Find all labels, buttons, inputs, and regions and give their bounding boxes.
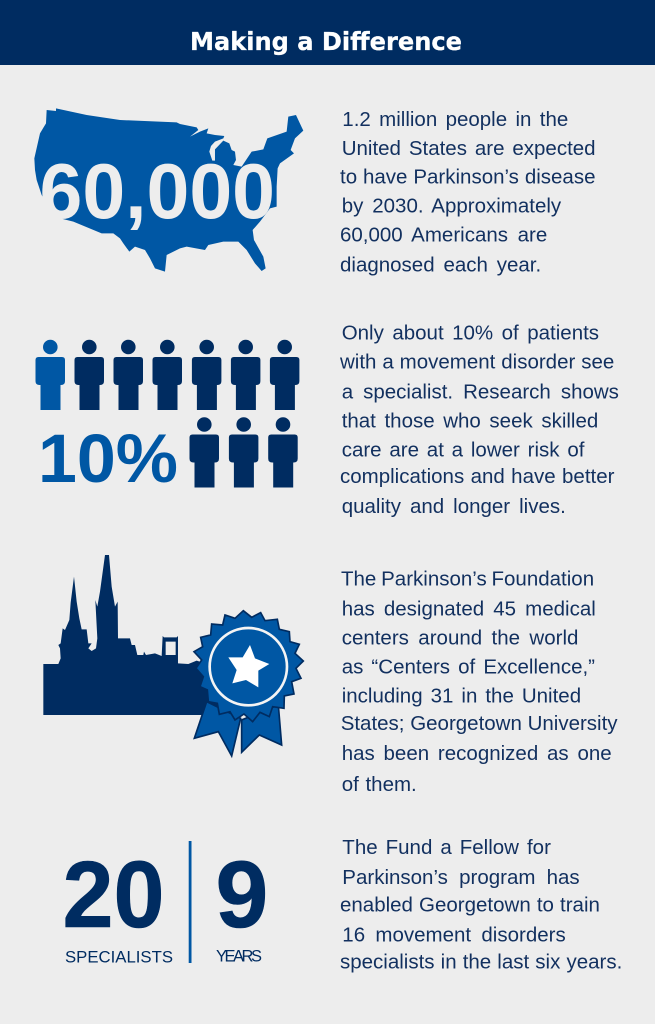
text block: specialist care: quality and longer lives. [342, 495, 566, 518]
panel: fellowship numbers [62, 836, 622, 973]
text block: prevalence: 60,000 Americans are [340, 224, 547, 247]
text block: fellowship: 16 movement disorders [342, 924, 566, 947]
text block: specialist care: care are at a lower risk of [342, 438, 585, 461]
big number 60,000: 60,000 [40, 147, 275, 235]
text block: fellowship: specialists in the last six years. [340, 950, 622, 973]
stat: 20 specialists: 20 [62, 842, 164, 948]
text block: specialist care: with a movement disorder see [339, 351, 614, 374]
text block: prevalence: by 2030. Approximately [342, 195, 562, 218]
text block: specialist care: Only about 10% of patients [342, 322, 599, 345]
panel: centers of excellence [43, 555, 618, 796]
panel: US statistic [34, 108, 596, 277]
text block: prevalence [340, 108, 596, 277]
stat: 9 years: 9 [216, 842, 268, 948]
stat: 20 specialists: SPECIALISTS [65, 949, 173, 967]
panel: specialist care [36, 322, 619, 518]
icon: people row one [74, 340, 299, 410]
text block: centers of excellence: has been recognized as one [342, 742, 612, 765]
star [228, 645, 269, 687]
text block: centers of excellence: has designated 45 medical [342, 598, 596, 621]
rosette [194, 611, 303, 722]
text block: prevalence: diagnosed each year. [340, 254, 541, 277]
text block: prevalence: United States are expected [342, 137, 596, 160]
ring [210, 628, 287, 705]
text block: fellowship: Parkinson’s program has [342, 866, 580, 889]
text block: specialist care: a specialist. Research shows [342, 381, 619, 404]
text block: centers of excellence [341, 568, 618, 796]
text block: specialist care: that those who seek skilled [342, 409, 598, 432]
text block: prevalence: to have Parkinson’s disease [340, 165, 596, 188]
big number 10%: 10% [38, 420, 178, 497]
icon: award ribbon [194, 611, 303, 756]
icon: university skyline [43, 555, 227, 715]
text block: prevalence: 1.2 million people in the [342, 108, 568, 131]
text block: centers of excellence: including 31 in the United [342, 684, 581, 707]
text block: centers of excellence: of them. [342, 773, 417, 796]
icon: people row two [190, 417, 298, 488]
icon: US map [34, 108, 303, 272]
text block: fellowship: enabled Georgetown to train [340, 894, 600, 917]
stat: 9 years: YEARS [216, 948, 262, 966]
text block: fellowship: The Fund a Fellow for [342, 836, 551, 859]
text block: centers of excellence: States; Georgetown University [341, 712, 618, 735]
text block: centers of excellence: The Parkinson’s Foundation [341, 568, 594, 591]
text block: specialist care: complications and have better [340, 465, 615, 488]
text block: centers of excellence: as “Centers of Excellence,” [342, 655, 595, 678]
ribbon tails [194, 702, 282, 756]
title: Making a Difference [190, 27, 462, 56]
icon: highlighted person [36, 340, 65, 410]
text block: centers of excellence: centers around the world [342, 626, 578, 649]
text block: fellowship [340, 836, 622, 973]
header band [0, 0, 655, 65]
text block: specialist care [339, 322, 619, 518]
divider [189, 841, 192, 963]
